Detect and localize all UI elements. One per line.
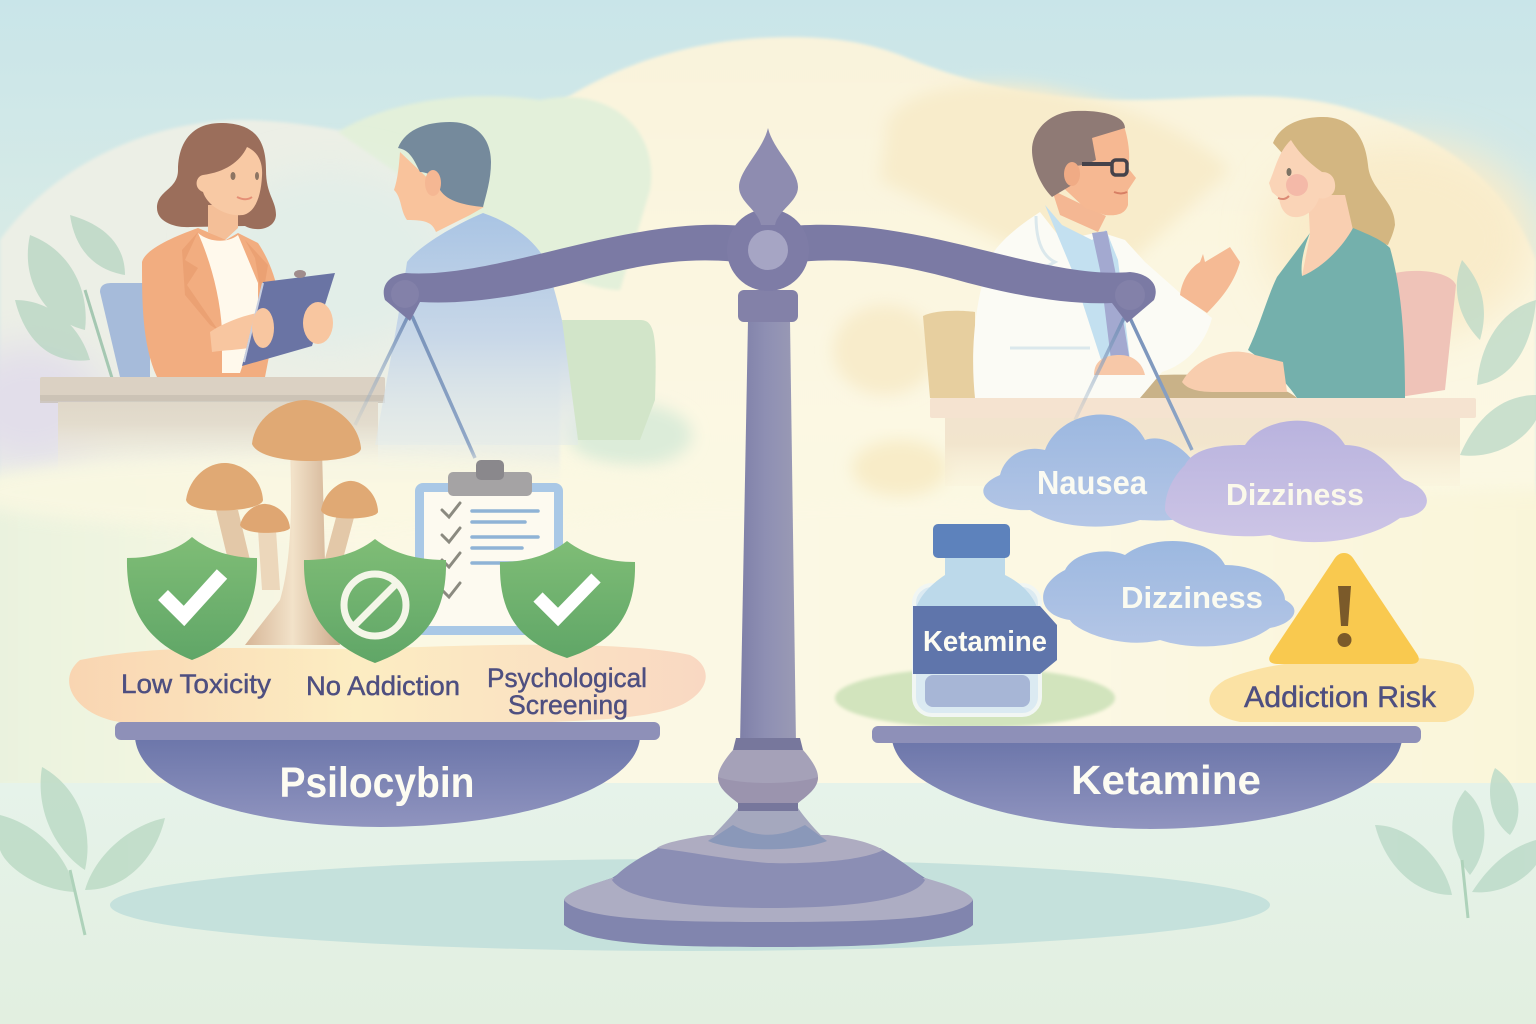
shield: no addiction (304, 539, 446, 663)
mushrooms (186, 400, 378, 645)
bottle label text: Ketamine (923, 626, 1047, 658)
symptom cloud: dizziness upper: Dizziness (1226, 477, 1364, 512)
label: psychological screening: Psychological (487, 663, 647, 693)
label: addiction risk: Addiction Risk (1244, 681, 1437, 714)
symptom cloud: dizziness lower (1043, 541, 1294, 646)
left chair and plant (15, 215, 150, 378)
left consultation scene (15, 122, 656, 470)
green wash under bottle (835, 668, 1115, 728)
shield: low toxicity (127, 537, 257, 660)
scale column (718, 290, 818, 811)
ketamine bottle (913, 524, 1057, 715)
woman patient (1182, 117, 1405, 398)
scale base (564, 808, 973, 947)
scale hanging strings (355, 316, 1192, 458)
label: psychological screening (487, 663, 647, 720)
warning triangle (1269, 553, 1419, 664)
woman clinician (142, 123, 280, 377)
right plant and chairs (923, 260, 1536, 456)
man patient from behind (375, 122, 656, 445)
mist over scene (0, 454, 700, 530)
right consultation scene (923, 111, 1536, 486)
left pan: psilocybin (115, 722, 660, 827)
orange wash under addiction label (1209, 657, 1474, 722)
label: low toxicity: Low Toxicity (121, 669, 272, 699)
bottom right plant (1375, 768, 1536, 918)
label band: psilocybin (69, 645, 706, 725)
desk left (40, 377, 385, 470)
clipboard held (242, 270, 335, 366)
symptom cloud: nausea (983, 415, 1212, 527)
scale finial (739, 128, 798, 225)
shield: psychological screening (500, 541, 635, 658)
pan title: psilocybin: Psilocybin (280, 759, 474, 807)
balance scale (384, 128, 1156, 947)
label: no addiction: No Addiction (306, 671, 460, 701)
checklist clipboard (415, 460, 563, 635)
pan title: ketamine: Ketamine (1071, 757, 1261, 803)
label: psychological screening: Screening (508, 690, 628, 720)
doctor (973, 111, 1240, 398)
symptom cloud: dizziness lower: Dizziness (1121, 580, 1263, 615)
symptom cloud: dizziness upper (1165, 421, 1427, 542)
scale beam (384, 209, 1156, 323)
right pan: ketamine (872, 726, 1421, 829)
bottom left plant (0, 767, 165, 935)
symptom cloud: nausea: Nausea (1037, 464, 1148, 501)
desk right (930, 375, 1476, 486)
